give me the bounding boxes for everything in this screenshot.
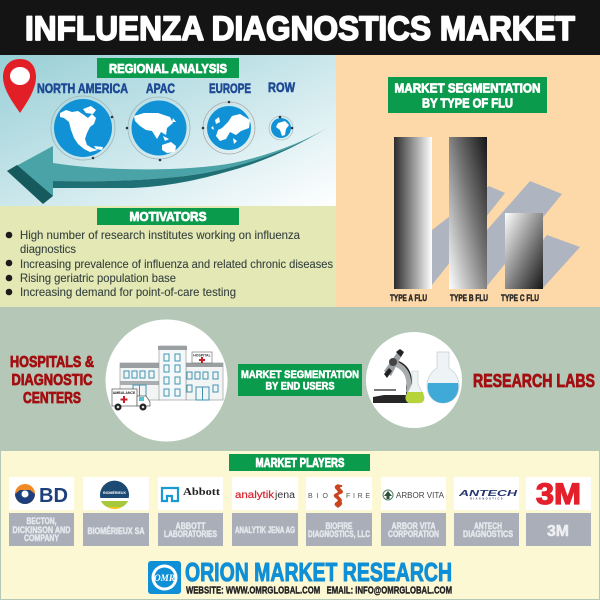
player: abbott: LABORATORIES: [164, 529, 217, 539]
player: arbor vita: ARBOR VITA: [392, 521, 436, 531]
bullet list: Increasing prevalence of influenza and related chronic diseases: [20, 257, 333, 271]
player: biomerieux: BIOMÉRIEUX: [103, 490, 126, 495]
player: biofire: BIO: [308, 493, 329, 500]
heading: regional analysis: REGIONAL ANALYSIS: [109, 61, 227, 76]
player: analytik jena: analytik: [235, 490, 275, 501]
bullet list: Increasing demand for point-of-care testing: [20, 285, 236, 299]
player: bd: DICKINSON AND: [12, 525, 71, 535]
heading: market players: MARKET PLAYERS: [256, 456, 344, 470]
bullet list: Rising geriatric population base: [20, 271, 176, 285]
icon: hospital: HOSPITAL: [193, 354, 212, 358]
panel: market segmentation by type of flu: [336, 55, 600, 307]
bullet list: High number of research institutes working on influenza: [20, 228, 300, 242]
bar chart: [390, 137, 580, 304]
player: abbott: Abbott: [183, 487, 221, 498]
player: arbor vita: [381, 477, 446, 546]
region labels: [37, 80, 295, 96]
player: antech: [454, 477, 519, 546]
icon: omr logo: OMR: [154, 573, 175, 583]
heading: end users: [238, 364, 362, 396]
bar: type c: [501, 213, 543, 304]
player: biomerieux: [83, 477, 149, 546]
globe: europe: [202, 101, 255, 154]
player: arbor vita: ARBOR VITA: [396, 491, 445, 500]
heading: type of flu: BY TYPE OF FLU: [422, 96, 513, 110]
player: biofire: [306, 477, 372, 546]
player: abbott: ABBOTT: [176, 521, 206, 531]
heading: type of flu: [388, 77, 547, 113]
label: hospitals: CENTERS: [23, 390, 81, 407]
player: bd: COMPANY: [24, 533, 59, 543]
player: abbott: [158, 477, 223, 546]
region labels: NORTH AMERICA: [37, 81, 128, 96]
player: analytik jena: jena: [274, 490, 295, 501]
player: antech: ANTECH: [474, 521, 502, 531]
panel: motivators: [0, 206, 336, 307]
player: arbor vita: CORPORATION: [388, 529, 439, 539]
heading: type of flu: MARKET SEGMENTATION: [394, 80, 540, 96]
bullet list: diagnostics: [20, 242, 76, 256]
bar: type b: [449, 137, 488, 304]
bullet list: [6, 228, 333, 299]
player: bd: BECTON,: [26, 516, 56, 526]
icon: hospital: AMBULANCE: [113, 391, 136, 395]
player: antech: DIAGNOSTICS: [470, 498, 504, 500]
panel: end users: [0, 307, 600, 450]
label: hospitals: [10, 354, 94, 407]
heading: motivators: [97, 208, 239, 225]
footer: orion market research: [148, 557, 452, 596]
label: hospitals: HOSPITALS &: [10, 354, 94, 371]
player: 3m: [526, 477, 591, 546]
heading: motivators: MOTIVATORS: [130, 210, 206, 224]
player: analytik jena: ANALYTIK JENA AG: [235, 525, 295, 535]
icon: hospital: [106, 320, 228, 442]
player: bd: [9, 477, 74, 546]
panel: market players: [0, 450, 600, 600]
player: analytik jena: [232, 477, 298, 546]
region labels: EUROPE: [209, 81, 251, 96]
bar: type c: TYPE C FLU: [501, 293, 539, 304]
player: antech: DIAGNOSTICS: [463, 529, 513, 539]
player: bd: BD: [39, 484, 68, 507]
icon: lab equipment: [366, 332, 462, 428]
panel: title bar: [0, 0, 600, 55]
bar: type a: [390, 137, 432, 304]
globe: row: [269, 116, 293, 140]
title: INFLUENZA DIAGNOSTICS MARKET: [25, 10, 575, 48]
company name: ORION MARKET RESEARCH: [185, 557, 452, 587]
player: 3m: 3M: [547, 523, 569, 540]
icon: omr logo: [148, 561, 181, 594]
player: biofire: FIRE: [346, 493, 370, 500]
heading: end users: BY END USERS: [266, 380, 334, 392]
bar: type b: TYPE B FLU: [450, 293, 488, 304]
region labels: ROW: [268, 80, 295, 95]
player: biofire: DIAGNOSTICS, LLC: [308, 529, 370, 539]
bar: type a: TYPE A FLU: [390, 293, 427, 304]
player: 3m: 3M: [536, 478, 581, 511]
heading: regional analysis: [97, 58, 239, 78]
icon: map pin: [3, 59, 36, 113]
contact line: WEBSITE: WWW.OMRGLOBAL.COM EMAIL: INFO@OMRGLOBAL.COM: [186, 586, 452, 596]
globe: apac: [126, 97, 190, 161]
player: biofire: BIOFIRE: [326, 521, 352, 531]
player: biomerieux: BIOMÉRIEUX SA: [88, 526, 145, 536]
arrow: [7, 125, 332, 204]
heading: end users: MARKET SEGMENTATION: [241, 369, 359, 381]
label: hospitals: DIAGNOSTIC: [12, 372, 92, 389]
globe: north america: [51, 96, 115, 160]
panel: regional analysis: [0, 55, 336, 206]
heading: market players: [229, 454, 370, 471]
region labels: APAC: [146, 81, 175, 96]
player: antech: ANTECH: [457, 488, 518, 498]
